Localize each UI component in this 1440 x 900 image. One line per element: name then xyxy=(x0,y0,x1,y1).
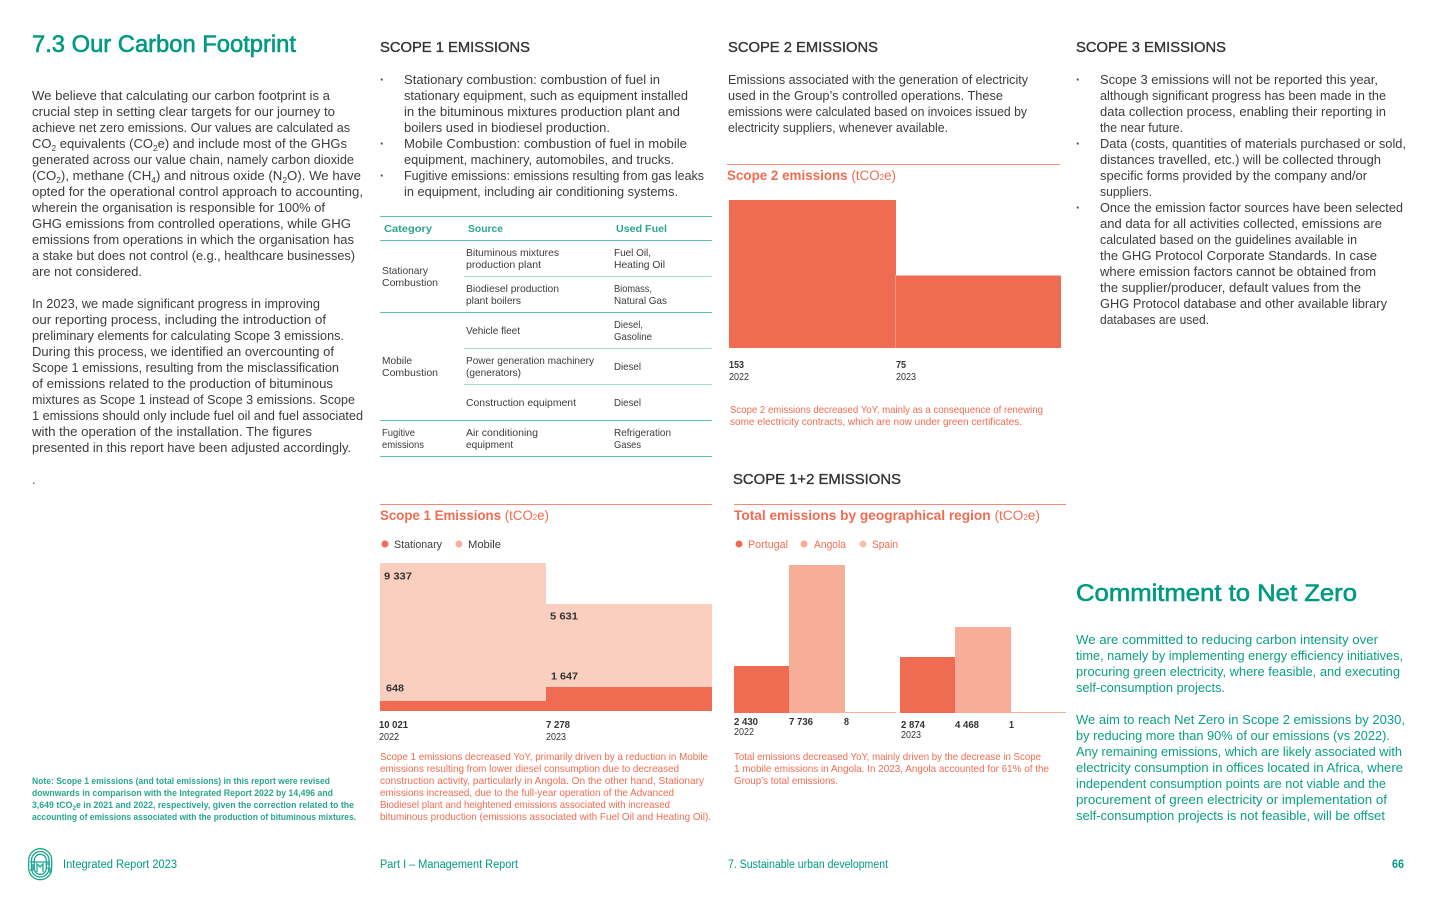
note: restatement: Note: Scope 1 emissions (and total emissions) in this report were revised xyxy=(32,776,330,786)
chart commentary xyxy=(730,405,1043,428)
chart title: Scope 1 Emissions (tCO2e) xyxy=(380,508,549,523)
chart commentary: 1 mobile emissions in Angola. In 2023, Angola accounted for 61% of the xyxy=(734,764,1049,775)
text block: commitment: We are committed to reducing carbon intensity over xyxy=(1076,633,1378,647)
table: fuel column: Fuel Oil, xyxy=(614,248,651,259)
bullet list: scope 3: GHG Protocol database and other available library xyxy=(1100,297,1388,311)
table: source column: equipment xyxy=(466,440,513,451)
bullet list: scope 3: where emission factors cannot be obtained from xyxy=(1099,265,1376,279)
table: category column: Combustion xyxy=(382,368,438,379)
chart commentary xyxy=(380,752,711,823)
table: fuel column: Diesel, xyxy=(614,320,643,331)
value labels: 5 631 xyxy=(550,612,578,622)
heading: scope 3: SCOPE 3 EMISSIONS xyxy=(1076,39,1226,56)
value labels xyxy=(729,360,916,383)
text block: introduction: equivalents (CO xyxy=(56,137,153,151)
table: emission sources xyxy=(380,216,712,456)
chart commentary: some electricity contracts, which are now under green certificates. xyxy=(730,417,1022,428)
text block: commitment: procuring green electricity, where feasible, and executing xyxy=(1076,665,1400,679)
bars xyxy=(729,200,1061,348)
heading: scope 1+2: SCOPE 1+2 EMISSIONS xyxy=(733,471,901,488)
panel: scope 2 emissions chart xyxy=(727,164,1061,428)
bullet list: scope 1: stationary equipment, such as equipment installed xyxy=(404,89,688,103)
text block: introduction xyxy=(31,89,363,279)
table: fuel column: Diesel xyxy=(614,398,641,409)
text block: reporting progress: our reporting process, including the introduction of xyxy=(32,313,327,327)
value labels: 75 xyxy=(896,360,906,371)
chart title: Scope 2 emissions (tCO2e) xyxy=(727,168,896,183)
table: category column: Mobile xyxy=(382,356,412,367)
text block: reporting progress: with the operation of the installation. The figures xyxy=(31,425,312,439)
text block: introduction: opted for the operational control approach to accounting, xyxy=(32,185,363,199)
value labels xyxy=(379,572,578,743)
icon: logo xyxy=(29,849,52,880)
bullet list: scope 3: Once the emission factor sources have been selected xyxy=(1100,201,1403,215)
bullet list: scope 1: Mobile Combustion: combustion of fuel in mobile xyxy=(404,137,687,151)
note: restatement: 2 xyxy=(72,805,76,812)
value labels: 7 736 xyxy=(789,717,813,728)
note: restatement: 3,649 tCO xyxy=(32,800,74,810)
bullet list: scope 3: databases are used. xyxy=(1100,313,1209,327)
text block: introduction: emissions from operations in which the organisation has xyxy=(32,233,354,247)
bullet list: scope 3: Data (costs, quantities of materials purchased or sold, xyxy=(1100,137,1406,151)
text block: reporting progress: preliminary elements for calculating Scope 3 emissions. xyxy=(32,329,344,343)
bullet list: scope 3: Scope 3 emissions will not be reported this year, xyxy=(1100,73,1378,87)
chart commentary: emissions resulting from lower diesel consumption due to decreased xyxy=(380,764,679,775)
text block: introduction: generated across our value chain, namely carbon dioxide xyxy=(32,153,354,167)
text block: introduction: wherein the organisation is responsible for 100% of xyxy=(31,201,326,215)
text block: reporting progress: . xyxy=(32,473,35,487)
legend: Portugal xyxy=(748,539,788,551)
footer: chapter: 7. Sustainable urban development xyxy=(728,859,889,871)
text block: introduction: 2 xyxy=(282,176,288,185)
text block: introduction: CO xyxy=(32,137,51,151)
text block: commitment: time, namely by implementing energy efficiency initiatives, xyxy=(1076,649,1403,663)
bullet list: scope 3: · xyxy=(1076,201,1080,215)
table: source column: Air conditioning xyxy=(466,428,538,439)
chart commentary: Group’s total emissions. xyxy=(734,776,838,787)
bullet list: scope 3: specific forms provided by the company and/or xyxy=(1100,169,1367,183)
table: fuel column: Refrigeration xyxy=(614,428,671,439)
bullet list: scope 1: boilers used in biodiesel production. xyxy=(404,121,610,135)
text block: introduction: O). We have xyxy=(287,169,361,183)
text block: commitment xyxy=(1076,633,1405,823)
heading: commitment to net zero: Commitment to Net Zero xyxy=(1076,580,1357,607)
table: category column: Stationary xyxy=(382,266,429,277)
text block: introduction: crucial step in setting clear targets for our journey to xyxy=(32,105,335,119)
text block: commitment: self-consumption projects is not feasible, will be offset xyxy=(1076,809,1386,823)
chart commentary: construction activity, particularly in Angola. On the other hand, Stationary xyxy=(380,776,705,787)
table: fuel column: Gasoline xyxy=(614,332,652,343)
note: restatement: downwards in comparison with the Integrated Report 2022 by 14,496 and xyxy=(32,788,333,798)
bullet list: scope 1: equipment, machinery, automobiles, and trucks. xyxy=(404,153,674,167)
value labels: 2023 xyxy=(896,372,916,383)
value labels: 648 xyxy=(386,684,404,694)
bullet list: scope 1: · xyxy=(380,137,384,151)
text block: introduction: We believe that calculating our carbon footprint is a xyxy=(32,89,330,103)
table: category column xyxy=(382,266,438,451)
table: fuel column: Biomass, xyxy=(614,284,652,295)
footer: part: Part I – Management Report xyxy=(380,859,519,871)
text block: scope 2: used in the Group’s controlled operations. These xyxy=(728,89,1003,103)
bullet list: scope 3: · xyxy=(1076,73,1080,87)
legend: Angola xyxy=(814,539,847,551)
text block: scope 2: electricity suppliers, whenever available. xyxy=(728,121,948,135)
table header: Source xyxy=(468,223,503,235)
chart commentary: Total emissions decreased YoY, mainly driven by the decrease in Scope xyxy=(734,752,1041,763)
text block: commitment: electricity consumption in offices located in Africa, where xyxy=(1076,761,1403,775)
value labels: 2022 xyxy=(734,727,754,738)
legend: Stationary xyxy=(394,539,442,551)
bullet list: scope 3: data collection process, enabling their reporting in xyxy=(1100,105,1386,119)
value labels: 2 874 xyxy=(901,720,925,731)
text block: reporting progress: of emissions related to the production of bituminous xyxy=(32,377,333,391)
text block: introduction: ), methane (CH xyxy=(61,169,151,183)
value labels: 1 647 xyxy=(551,672,578,682)
bullet list: scope 1: · xyxy=(380,169,384,183)
text block: reporting progress: Scope 1 emissions, resulting from the misclassification xyxy=(32,361,339,375)
legend xyxy=(736,539,898,551)
table header: Category xyxy=(384,223,432,235)
note: restatement xyxy=(32,776,356,822)
value labels: 9 337 xyxy=(384,572,412,582)
table: fuel column: Natural Gas xyxy=(614,296,667,307)
text block: reporting progress: During this process, we identified an overcounting of xyxy=(32,345,335,359)
table: source column: Construction equipment xyxy=(466,398,576,409)
title: 7.3 Our Carbon Footprint xyxy=(32,31,296,58)
grouped bars xyxy=(734,565,1066,713)
text block: reporting progress: presented in this report have been adjusted accordingly. xyxy=(32,441,351,455)
bullet list: scope 3: distances travelled, etc.) will be collected through xyxy=(1100,153,1381,167)
text block: reporting progress: mixtures as Scope 1 instead of Scope 3 emissions. Scope xyxy=(32,393,355,407)
note: restatement: accounting of emissions associated with the production of bituminous mixtures. xyxy=(32,812,356,822)
chart title: Total emissions by geographical region (tCO2e) xyxy=(734,508,1040,523)
chart commentary: Scope 1 emissions decreased YoY, primarily driven by a reduction in Mobile xyxy=(380,752,708,763)
chart commentary xyxy=(734,752,1049,787)
value labels xyxy=(734,717,1014,741)
table: source column xyxy=(466,248,595,451)
heading: scope 2: SCOPE 2 EMISSIONS xyxy=(728,39,878,56)
text block: commitment: We aim to reach Net Zero in Scope 2 emissions by 2030, xyxy=(1076,713,1405,727)
table: fuel column: Gases xyxy=(614,440,641,451)
text block: reporting progress xyxy=(31,297,363,487)
value labels: 7 278 xyxy=(546,720,570,731)
value labels: 2022 xyxy=(729,372,749,383)
text block: introduction: (CO xyxy=(32,169,55,183)
text block: introduction: 2 xyxy=(52,144,57,153)
legend: Spain xyxy=(872,539,898,551)
text block: introduction: 4 xyxy=(151,176,157,185)
text block: scope 2: emissions were calculated based on invoices issued by xyxy=(728,105,1028,119)
panel: emissions by region chart xyxy=(734,504,1066,787)
value labels: 2022 xyxy=(379,732,399,743)
value labels: 2023 xyxy=(901,730,921,741)
table header: Used Fuel xyxy=(616,223,667,235)
text block: commitment: Any remaining emissions, which are likely associated with xyxy=(1076,745,1402,759)
text block: introduction: are not considered. xyxy=(32,265,142,279)
legend xyxy=(382,539,501,551)
text block: introduction: GHG emissions from controlled operations, while GHG xyxy=(32,217,351,231)
table: fuel column: Diesel xyxy=(614,362,641,373)
text block: introduction: 2 xyxy=(153,144,158,153)
table: source column: Bituminous mixtures xyxy=(466,248,559,259)
table: source column: Vehicle fleet xyxy=(466,326,520,337)
bullet list: scope 1: · xyxy=(380,73,384,87)
text block: introduction: 2 xyxy=(56,176,62,185)
table: fuel column: Heating Oil xyxy=(614,260,665,271)
text block: introduction: a stake but does not control (e.g., healthcare businesses) xyxy=(32,249,355,263)
value labels: 153 xyxy=(729,360,744,371)
bullet list: scope 3: although significant progress has been made in the xyxy=(1100,89,1386,103)
text block: commitment: independent consumption points are not viable and the xyxy=(1076,777,1386,791)
chart commentary: Scope 2 emissions decreased YoY, mainly as a consequence of renewing xyxy=(730,405,1043,416)
footer: page number: 66 xyxy=(1392,859,1404,871)
chart commentary: Biodiesel plant and heightened emissions associated with increased xyxy=(380,800,670,811)
note: restatement: e in 2021 and 2022, respectively, given the correction related to the xyxy=(76,800,354,810)
table: source column: Biodiesel production xyxy=(466,284,559,295)
table: fuel column xyxy=(614,248,671,451)
bullet list: scope 3: and data for all activities collected, emissions are xyxy=(1100,217,1382,231)
value labels: 2023 xyxy=(546,732,566,743)
bullet list: scope 1 xyxy=(380,73,704,199)
value labels: 8 xyxy=(844,717,849,728)
bullet list: scope 3: calculated based on the guidelines available in xyxy=(1100,233,1357,247)
bullet list: scope 3: the near future. xyxy=(1100,121,1183,135)
table: source column: production plant xyxy=(466,260,541,271)
text block: commitment: self-consumption projects. xyxy=(1076,681,1225,695)
bullet list: scope 3: the GHG Protocol Corporate Standards. In case xyxy=(1100,249,1377,263)
text block: scope 2 xyxy=(728,73,1029,135)
value labels: 2 430 xyxy=(734,717,758,728)
text block: introduction: achieve net zero emissions. Our values are calculated as xyxy=(32,121,350,135)
bullet list: scope 1: in equipment, including air conditioning systems. xyxy=(404,185,678,199)
bullet list: scope 1: Fugitive emissions: emissions resulting from gas leaks xyxy=(404,169,704,183)
bullet list: scope 3 xyxy=(1076,73,1406,327)
text block: introduction: ) and nitrous oxide (N xyxy=(156,169,282,183)
panel: scope 1 emissions chart xyxy=(379,504,712,823)
stacked bars xyxy=(380,563,712,711)
value labels: 4 468 xyxy=(955,720,979,731)
bullet list: scope 3: suppliers. xyxy=(1100,185,1152,199)
chart commentary: emissions increased, due to the full-year operation of the Advanced xyxy=(380,788,674,799)
table header xyxy=(384,223,667,235)
text block: commitment: procurement of green electricity or implementation of xyxy=(1076,793,1388,807)
value labels: 1 xyxy=(1009,720,1014,731)
bullet list: scope 1: Stationary combustion: combustion of fuel in xyxy=(404,73,660,87)
heading: scope 1: SCOPE 1 EMISSIONS xyxy=(380,39,530,56)
text block: introduction: e) and include most of the GHGs xyxy=(158,137,347,151)
table: category column: Combustion xyxy=(382,278,438,289)
text block: reporting progress: 1 emissions should only include fuel oil and fuel associated xyxy=(32,409,363,423)
bullet list: scope 3: · xyxy=(1076,137,1080,151)
value labels: 10 021 xyxy=(379,720,408,731)
text block: commitment: by reducing more than 90% of our emissions (vs 2022). xyxy=(1076,729,1390,743)
table: source column: (generators) xyxy=(466,368,521,379)
table: source column: Power generation machinery xyxy=(466,356,595,367)
table: source column: plant boilers xyxy=(466,296,521,307)
legend: Mobile xyxy=(468,539,501,551)
table: category column: emissions xyxy=(382,440,424,451)
table: category column: Fugitive xyxy=(382,428,415,439)
chart commentary: bituminous production (emissions associated with Fuel Oil and Heating Oil). xyxy=(380,812,711,823)
footer: report name: Integrated Report 2023 xyxy=(63,859,177,871)
bullet list: scope 3: the supplier/producer, default values from the xyxy=(1100,281,1361,295)
text block: reporting progress: In 2023, we made significant progress in improving xyxy=(32,297,320,311)
bullet list: scope 1: in the bituminous mixtures production plant and xyxy=(404,105,680,119)
text block: scope 2: Emissions associated with the generation of electricity xyxy=(728,73,1029,87)
